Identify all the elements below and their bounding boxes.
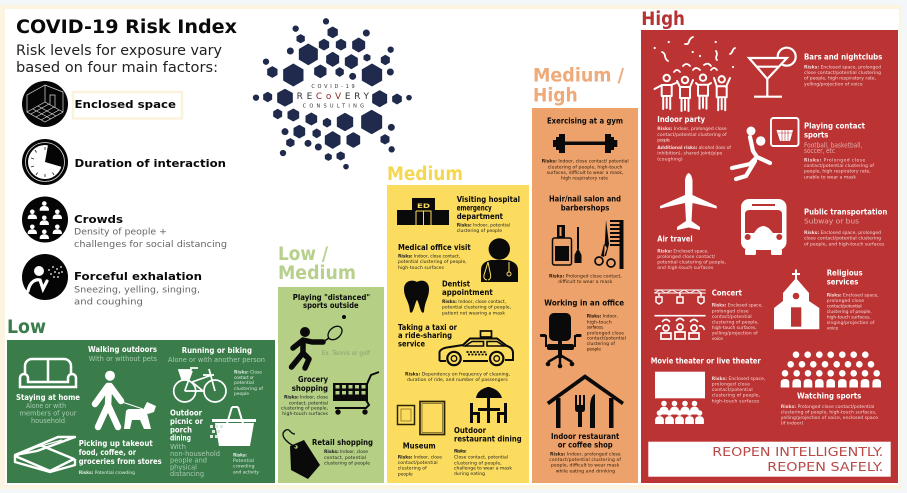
text: picking up takeout: groceries from stores bbox=[79, 456, 162, 466]
title: COVID-19 Risk Index bbox=[16, 17, 237, 38]
intro text: based on four main factors: bbox=[16, 60, 218, 76]
heading: Low / Medium: Medium bbox=[278, 263, 356, 284]
text: movie theater risks: high-touch surfaces bbox=[712, 398, 760, 404]
text: gym heading: Exercising at a gym bbox=[547, 115, 623, 125]
text: walking outdoors bbox=[88, 344, 157, 363]
text: indoor restaurant: Indoor restaurant bbox=[551, 431, 619, 441]
text: visiting hospital: clustering of people bbox=[457, 228, 502, 234]
text: public transportation: Risks: Enclosed space, prolonged bbox=[804, 230, 881, 236]
text: playing contact sports: people, high respiratory rate, bbox=[804, 169, 871, 175]
text: religious services: services bbox=[827, 276, 858, 286]
text: picnic risks: and activity bbox=[233, 469, 259, 475]
text: bars and nightclubs: Risks: Enclosed space, prolonged bbox=[804, 65, 881, 71]
heading: Low / Medium: Low / bbox=[278, 244, 328, 265]
text: movie theater heading: Movie theater or live theater bbox=[651, 355, 761, 365]
text: outdoor picnic: distancing bbox=[170, 469, 204, 478]
text: office risks: clustering of bbox=[587, 341, 615, 347]
text: taxi bbox=[398, 322, 458, 349]
text: public transportation bbox=[804, 206, 887, 247]
text: biking risks: potential bbox=[234, 380, 254, 386]
icon: tooth bbox=[404, 281, 429, 313]
text: office risks: high-touch bbox=[587, 320, 612, 326]
icon: picnic basket bbox=[210, 407, 256, 446]
text: indoor party: Risks: Indoor, prolonged close bbox=[657, 126, 727, 132]
description: and coughing bbox=[74, 298, 143, 308]
text: outdoor picnic: Outdoor bbox=[170, 408, 203, 418]
text: taxi: Taking a taxi or bbox=[398, 322, 458, 332]
text: concert bbox=[712, 288, 763, 342]
icon: sports crowd bbox=[781, 351, 881, 388]
text: visiting hospital: Risks: Indoor, potential bbox=[457, 223, 510, 229]
text: religious services: Risks: Enclosed space, bbox=[827, 293, 879, 299]
text: gym risks: high respiratory rate bbox=[561, 175, 608, 181]
text: outdoor picnic: people and bbox=[170, 456, 207, 465]
text: picnic risks: Risks: bbox=[233, 453, 247, 459]
text: office risks: prolonged close bbox=[587, 330, 624, 336]
text: air travel: Risks: Enclosed space, bbox=[657, 248, 709, 254]
text: office risks: people bbox=[587, 346, 601, 352]
text: indoor party: inhibition), shared joint/pipe bbox=[657, 150, 723, 156]
text: outdoor restaurant dining: Close contact, potential bbox=[454, 454, 508, 460]
text: playing contact sports bbox=[804, 120, 874, 180]
icon: person exhaling bbox=[22, 254, 68, 300]
text: religious services: high-touch surfaces, bbox=[827, 315, 871, 321]
text: outdoor picnic bbox=[170, 408, 220, 478]
text: playing contact sports: Risks: Prolonged close bbox=[804, 158, 866, 164]
text: gym risks bbox=[542, 159, 629, 181]
panel: medium to high risk bbox=[532, 108, 638, 483]
text: picking up takeout: food, coffee, or bbox=[79, 447, 137, 457]
text: picking up takeout bbox=[79, 438, 162, 476]
icon: scissors and comb bbox=[595, 220, 624, 269]
text: religious services: Religious bbox=[827, 268, 863, 278]
logo: Recovery Consulting: COVID-19 bbox=[311, 84, 355, 90]
text: medical office visit: Risks: Indoor, close contact, bbox=[398, 254, 460, 260]
text: biking risks bbox=[234, 370, 263, 397]
icon: church bbox=[774, 270, 819, 329]
text: movie theater risks: contact/potential bbox=[712, 387, 753, 393]
icon: indoor party bbox=[654, 37, 735, 111]
text: gym risks: clustering of people, high-touch bbox=[548, 165, 623, 171]
text: air travel: potential clustering of people, bbox=[657, 260, 726, 266]
logo: Recovery Consulting: RECoVERY bbox=[297, 92, 369, 102]
icon: basketball player and hoop bbox=[732, 118, 798, 179]
text: indoor restaurant bbox=[551, 431, 619, 449]
text: biking risks: people bbox=[234, 391, 249, 397]
text: playing distanced sports: Playing "distanced" bbox=[293, 292, 370, 302]
text: dentist appointment: Risks: Indoor, close contact, bbox=[442, 299, 506, 305]
icon: shopping cart bbox=[333, 372, 379, 415]
icon: bus bbox=[741, 199, 786, 255]
text: religious services: singing/projection of bbox=[827, 320, 875, 326]
text: indoor party: Additional risks: alcohol (loss of bbox=[657, 145, 731, 151]
icon: crowd bbox=[22, 196, 68, 242]
text: bars and nightclubs: Bars and nightclubs bbox=[804, 51, 882, 61]
text: watching sports: Risks: Prolonged close contact/potential bbox=[781, 404, 874, 410]
text: watching sports bbox=[781, 391, 878, 427]
text: watching sports: Watching sports bbox=[797, 391, 861, 401]
icon: dumbbell bbox=[553, 134, 617, 153]
label: Duration of interaction bbox=[74, 157, 226, 170]
text: visiting hospital bbox=[457, 194, 520, 234]
text: salon risks: difficult to wear a mask bbox=[558, 279, 613, 285]
text: biking risks: contact or bbox=[234, 375, 254, 381]
text: outdoor picnic: With bbox=[170, 442, 186, 451]
text: bars and nightclubs: yelling/projection of voice bbox=[804, 81, 863, 87]
panel: low to medium risk bbox=[278, 287, 384, 483]
panel: low risk bbox=[7, 340, 275, 483]
text: biking risks: Risks: Close bbox=[234, 370, 262, 376]
logo: Recovery Consulting bbox=[253, 19, 411, 169]
text: tennis example: Ex. Tennis or golf bbox=[322, 350, 371, 357]
text: running or biking bbox=[168, 345, 265, 364]
text: playing distanced sports: sports outside bbox=[303, 300, 359, 310]
text: air travel: prolonged close contact/ bbox=[657, 254, 715, 260]
text: bars and nightclubs: of people, high respiratory rate, bbox=[804, 76, 876, 82]
text: movie theater risks: clustering of people, bbox=[712, 393, 760, 399]
icon: hospital ED building bbox=[397, 198, 449, 225]
text: grocery shopping: high-touch surfaces bbox=[282, 411, 329, 417]
text: retail shopping: Retail shopping bbox=[312, 437, 373, 447]
text: playing contact sports: contact/potential clustering of bbox=[804, 163, 874, 169]
text: office heading: Working in an office bbox=[544, 298, 624, 308]
text: public transportation: Subway or bus bbox=[804, 217, 859, 226]
text: bars and nightclubs: close contact/potential clustering bbox=[804, 70, 881, 76]
icon: cocktail glass bbox=[749, 48, 796, 97]
description bbox=[74, 286, 200, 308]
text: playing distanced sports bbox=[293, 292, 370, 310]
highlight box bbox=[73, 92, 182, 118]
text: biking risks: clustering of bbox=[234, 386, 263, 392]
text: concert: Risks: Enclosed space, bbox=[712, 303, 763, 309]
text: indoor party bbox=[657, 114, 731, 162]
text: salon risks: Risks: Prolonged close contact, bbox=[549, 274, 622, 280]
text: staying at home bbox=[16, 392, 80, 425]
text: medical office visit: Medical office visit bbox=[398, 242, 471, 252]
text: picnic risks bbox=[233, 453, 259, 475]
text: playing contact sports: Playing contact bbox=[804, 120, 865, 130]
icon: doctor bbox=[481, 238, 518, 282]
text: bars and nightclubs bbox=[804, 51, 882, 87]
icon: clock bbox=[22, 139, 68, 185]
text: taxi risks: duration of ride, and number of passengers bbox=[407, 377, 508, 383]
text: watching sports: clustering of people, high-touch surfaces, bbox=[781, 409, 876, 415]
label: Forceful exhalation bbox=[74, 270, 202, 283]
description bbox=[74, 228, 227, 250]
text: outdoor picnic: dining bbox=[170, 433, 191, 443]
text: museum: Risks: Indoor, close bbox=[398, 454, 442, 460]
text: religious services: prolonged close bbox=[827, 298, 864, 304]
callout: reopen intelligently bbox=[648, 442, 891, 477]
logo: Recovery Consulting: CONSULTING bbox=[303, 104, 364, 110]
text: watching sports: yelling/projection of voice, enclosed space bbox=[781, 415, 878, 421]
text: picnic risks: Potential bbox=[233, 458, 254, 464]
panel: high risk bbox=[641, 30, 898, 483]
text: playing contact sports: unable to wear a mask bbox=[804, 174, 856, 180]
text: playing contact sports: Football, basketball, bbox=[804, 140, 862, 149]
text: outdoor picnic: porch bbox=[170, 424, 192, 434]
text: medical office visit bbox=[398, 242, 471, 271]
heading: Low: Low bbox=[7, 317, 46, 338]
text: dentist appointment: potential clustering of people, bbox=[442, 305, 511, 311]
icon: enclosed room bbox=[22, 81, 68, 127]
text: outdoor restaurant dining: Risks: bbox=[454, 449, 467, 455]
callout: reopen intelligently: REOPEN SAFELY. bbox=[767, 459, 883, 474]
text: picking up takeout: Picking up takeout bbox=[79, 438, 153, 448]
text: picking up takeout: Risks: Potential crowding bbox=[79, 470, 135, 476]
text: office risks: Risks: Indoor, bbox=[587, 314, 618, 320]
heading: Low / Medium bbox=[278, 244, 356, 284]
icon: tennis player bbox=[292, 315, 346, 368]
text: staying at home: Staying at home bbox=[16, 392, 80, 402]
text: taxi risks bbox=[405, 372, 510, 383]
text: indoor restaurant risks bbox=[549, 451, 621, 474]
text: indoor party: Indoor party bbox=[657, 114, 706, 124]
icon: movie theater bbox=[655, 372, 705, 424]
text: outdoor restaurant dining: Outdoor bbox=[454, 425, 487, 435]
text: playing contact sports: sports bbox=[804, 130, 828, 140]
factor: forceful exhalation bbox=[22, 254, 202, 308]
intro text bbox=[16, 43, 222, 76]
description: Sneezing, yelling, singing, bbox=[74, 286, 200, 296]
heading: High: High bbox=[641, 9, 685, 30]
icon: nail polish bbox=[552, 225, 582, 265]
description: Density of people + bbox=[74, 228, 167, 238]
text: museum bbox=[398, 441, 442, 477]
text: salon heading: Hair/nail salon and bbox=[549, 194, 621, 204]
text: indoor restaurant risks: contact/potential clustering of bbox=[549, 457, 621, 463]
text: dentist appointment: appointment bbox=[442, 287, 493, 297]
text: playing contact sports: soccer, etc bbox=[804, 146, 835, 155]
icon: museum frames bbox=[398, 402, 444, 434]
icon: airplane bbox=[660, 173, 717, 230]
text: dentist appointment bbox=[442, 279, 511, 317]
icon: taxi bbox=[440, 331, 513, 365]
text: grocery shopping: contact, potential bbox=[289, 400, 328, 406]
text: museum: people bbox=[398, 471, 413, 477]
description: challenges for social distancing bbox=[74, 240, 227, 250]
icon: hospital ED building: ED bbox=[417, 202, 431, 210]
text: salon heading: barbershops bbox=[561, 203, 610, 213]
text: medical office visit: potential clustering of people, bbox=[398, 259, 467, 265]
text: running or biking: Alone or with another person bbox=[168, 355, 265, 364]
heading: Medium / High bbox=[533, 66, 624, 107]
text: indoor restaurant risks: Risks: Indoor, prolonged close bbox=[550, 451, 621, 457]
text: outdoor restaurant dining: challenge to wear a mask bbox=[454, 466, 512, 472]
label: Enclosed space bbox=[74, 98, 176, 111]
text: visiting hospital: Visiting hospital bbox=[457, 194, 520, 204]
text: movie theater risks bbox=[712, 376, 765, 404]
text: outdoor picnic: non-household bbox=[170, 449, 220, 458]
text: religious services: voice bbox=[827, 325, 839, 331]
text: concert: prolonged close bbox=[712, 308, 749, 314]
text: walking outdoors: Walking outdoors bbox=[88, 344, 157, 354]
text: concert: clustering of people, bbox=[712, 319, 759, 325]
text: outdoor restaurant dining: clustering of people, bbox=[454, 460, 502, 466]
text: indoor party: people bbox=[657, 138, 670, 144]
text: taxi risks: Risks: Dependency on frequency of cleaning, bbox=[405, 372, 510, 378]
text: retail shopping: clustering of people bbox=[324, 461, 370, 467]
text: movie theater risks: Risks: Enclosed space, bbox=[712, 376, 765, 382]
text: dentist appointment: Dentist bbox=[442, 279, 470, 289]
text: outdoor restaurant dining: restaurant dining bbox=[454, 434, 522, 444]
text: grocery shopping: clustering of people, bbox=[281, 405, 328, 411]
text: religious services bbox=[827, 268, 879, 331]
text: indoor restaurant: or coffee shop bbox=[558, 439, 613, 449]
text: outdoor picnic: picnic or bbox=[170, 416, 204, 426]
text: public transportation: close contact/potential clustering bbox=[804, 236, 881, 242]
text: concert: Concert bbox=[712, 288, 742, 298]
icon: takeout box bbox=[15, 437, 75, 472]
text: air travel: Air travel bbox=[657, 233, 693, 243]
text: grocery shopping: shopping bbox=[292, 383, 328, 393]
text: religious services: clustering of people, bbox=[827, 309, 872, 315]
text: office risks: surfaces, bbox=[587, 325, 604, 331]
text: watching sports: (if indoor) bbox=[781, 421, 804, 427]
text: outdoor restaurant dining bbox=[454, 425, 522, 477]
icon: concert stage bbox=[654, 290, 706, 339]
text: walking outdoors: With or without pets bbox=[89, 354, 157, 363]
text: retail shopping: contact, potential bbox=[324, 455, 366, 461]
intro text: Risk levels for exposure vary bbox=[16, 43, 222, 59]
text: museum: contact/potential bbox=[398, 460, 438, 466]
text: office risks: contact/potential bbox=[587, 335, 626, 341]
text: religious services: contact/potential bbox=[827, 304, 862, 310]
icon: outdoor dining table bbox=[470, 387, 507, 423]
text: indoor restaurant risks: people, difficult to wear mask bbox=[551, 462, 620, 468]
text: retail shopping bbox=[312, 437, 373, 467]
panel: medium risk bbox=[387, 185, 529, 483]
text: visiting hospital: department bbox=[457, 211, 503, 221]
text: staying at home: household bbox=[31, 416, 65, 425]
text: movie theater risks: prolonged close bbox=[712, 382, 750, 388]
text: taxi: a ride-sharing bbox=[398, 330, 452, 340]
text: concert: high-touch surfaces, bbox=[712, 325, 757, 331]
text: picnic risks: crowding bbox=[233, 464, 255, 470]
factor: duration of interaction bbox=[22, 139, 226, 185]
factor: enclosed space bbox=[22, 81, 182, 127]
text: running or biking: Running or biking bbox=[182, 345, 252, 355]
factor: crowds bbox=[22, 196, 227, 250]
text: grocery shopping: Risks: Indoor, close bbox=[284, 395, 328, 401]
heading: Medium: Medium bbox=[387, 164, 463, 185]
text: retail shopping: Risks: Indoor, close bbox=[324, 449, 368, 455]
icon: price tag bbox=[283, 430, 320, 479]
text: dentist appointment: patient not wearing a mask bbox=[442, 311, 505, 317]
icon: bicycle bbox=[174, 368, 226, 402]
text: taxi: service bbox=[398, 339, 425, 349]
text: outdoor picnic: physical bbox=[170, 462, 197, 471]
text: visiting hospital: emergency bbox=[457, 203, 492, 213]
icon: sofa bbox=[20, 359, 76, 387]
text: public transportation: of people, and high-touch surfaces bbox=[804, 241, 885, 247]
text: indoor party: contact/potential clustering of bbox=[657, 132, 727, 138]
text: grocery shopping: Grocery bbox=[298, 374, 329, 384]
text: gym risks: surfaces, difficult to wear a mask, bbox=[547, 170, 623, 176]
icon: person walking dog bbox=[95, 371, 156, 429]
callout: reopen intelligently: REOPEN INTELLIGENTLY. bbox=[712, 444, 883, 459]
text: concert: voice bbox=[712, 336, 723, 342]
text: concert: contact/potential bbox=[712, 314, 752, 320]
text: staying at home: Alone or with bbox=[26, 401, 66, 410]
text: indoor party: (coughing) bbox=[657, 156, 683, 162]
text: public transportation: Public transportation bbox=[804, 206, 887, 216]
text: gym risks: Risks: Indoor, close contact/ potential bbox=[542, 159, 629, 165]
text: medical office visit: high-touch surfaces bbox=[398, 265, 445, 271]
text: salon risks bbox=[549, 274, 622, 285]
text: grocery shopping bbox=[281, 374, 329, 417]
text: office risks bbox=[587, 314, 626, 352]
label: Crowds bbox=[74, 213, 123, 226]
icon: office chair bbox=[540, 313, 582, 368]
text: museum: clustering of bbox=[398, 465, 427, 471]
text: staying at home: members of your bbox=[20, 409, 77, 418]
text: air travel: and high-touch surfaces bbox=[657, 265, 714, 271]
icon: restaurant house bbox=[547, 374, 624, 428]
text: concert: yelling/projection of bbox=[712, 330, 758, 336]
text: museum: Museum bbox=[403, 441, 436, 451]
text: salon heading bbox=[549, 194, 621, 213]
text: outdoor restaurant dining: during eating bbox=[454, 471, 485, 477]
text: air travel bbox=[657, 233, 726, 271]
heading: Medium / High: Medium / bbox=[533, 66, 624, 87]
heading: Medium / High: High bbox=[533, 86, 578, 107]
text: indoor restaurant risks: while eating and drinking bbox=[556, 468, 615, 474]
